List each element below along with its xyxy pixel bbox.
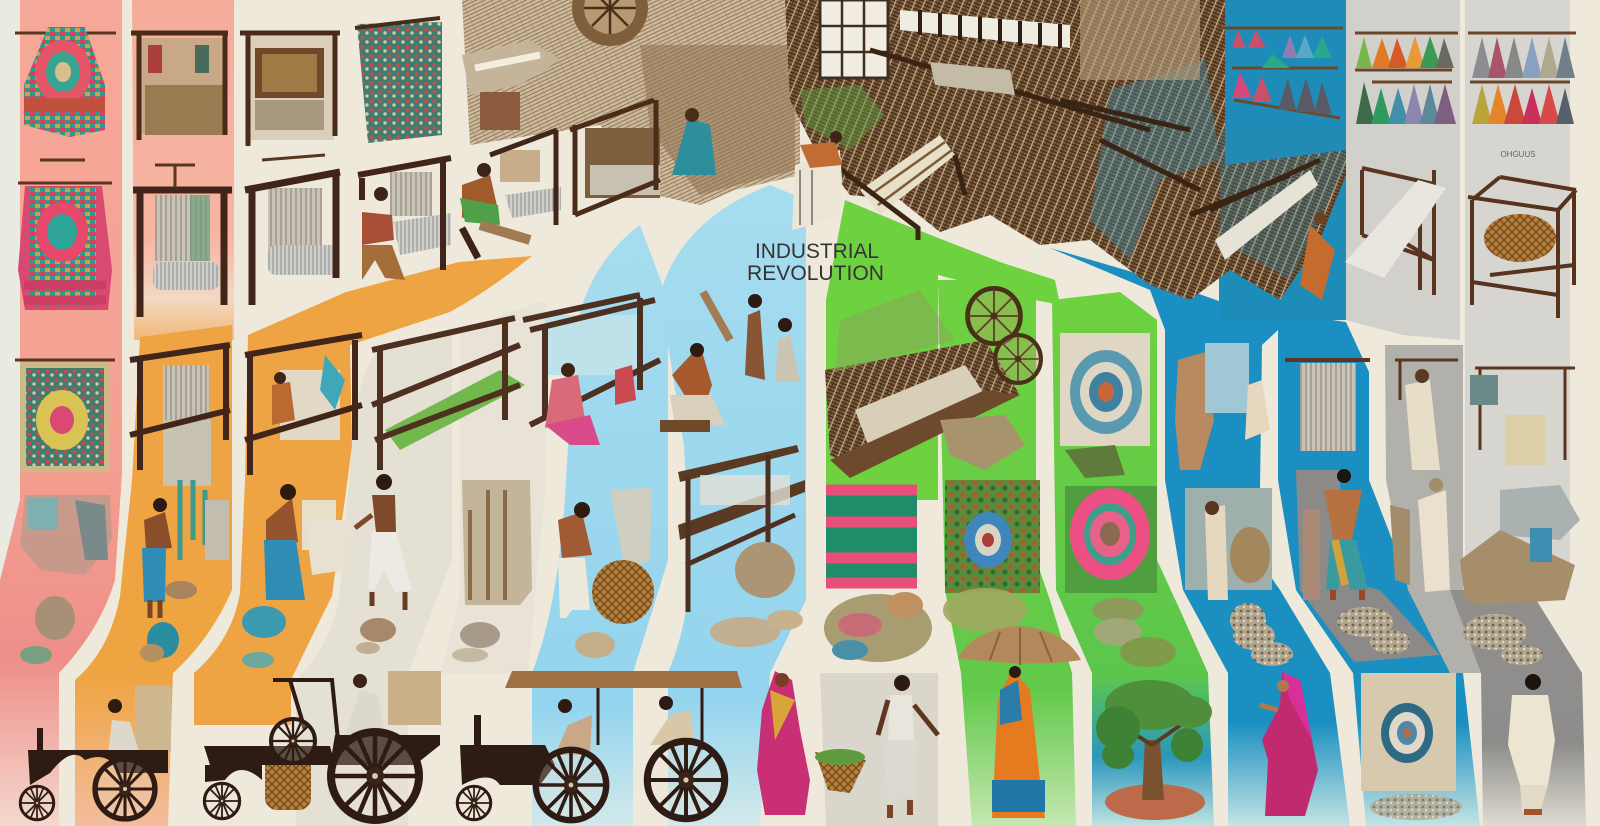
stream: beige column seven — [820, 673, 938, 826]
rider one head — [558, 699, 572, 713]
small wheel — [20, 786, 54, 820]
shelf: cones in blue panel — [1220, 28, 1343, 118]
machine body — [825, 340, 1020, 470]
panel: sketch clutter upper middle — [462, 0, 800, 205]
bushes: green — [1092, 598, 1176, 667]
row: third looms — [15, 288, 1041, 486]
canopy rail — [273, 680, 338, 740]
tapestry: top floral — [355, 18, 442, 143]
figure: man with loom — [264, 484, 352, 600]
loom frame — [1362, 168, 1434, 295]
bundles orange one — [140, 581, 197, 662]
sketch area — [462, 0, 800, 205]
loom: white cloth right — [1345, 168, 1446, 295]
shelf rack — [1220, 28, 1343, 118]
stream: green column nine — [1052, 292, 1214, 826]
figure: man in cream — [1508, 674, 1555, 812]
loom: row 3 d with worker — [523, 295, 660, 445]
cones row 2 left — [1356, 82, 1456, 124]
basket — [592, 560, 654, 624]
small wheel — [457, 786, 491, 820]
loom: top 2 — [131, 33, 228, 140]
deck — [330, 735, 440, 765]
figure: white robes grey — [1390, 478, 1450, 592]
figure: man in white — [878, 675, 938, 818]
factory clutter — [785, 0, 1346, 300]
loom: row 3 a — [130, 345, 230, 486]
posts — [598, 688, 702, 750]
white warp — [1300, 363, 1356, 451]
loom: row 2 d with green worker — [460, 130, 561, 258]
figure: kneeling white — [1405, 380, 1440, 470]
cart two — [204, 671, 441, 820]
factory stone sign — [930, 62, 1015, 95]
factory high windows — [900, 10, 1070, 48]
figure: woman in magenta sari — [1260, 672, 1318, 816]
factory green plants — [800, 85, 885, 150]
gravel — [1370, 794, 1462, 820]
row: fourth figures — [20, 445, 1580, 668]
tapestry: stripes — [826, 485, 917, 588]
shelf: left rods — [1355, 33, 1458, 82]
machine base — [830, 390, 1020, 478]
cart one — [20, 686, 171, 820]
tapestry: row 2 — [18, 160, 112, 310]
rider two — [650, 710, 695, 745]
panel: cone shelves right — [1355, 33, 1576, 159]
people: two fibre workers — [703, 292, 800, 382]
driver head — [108, 699, 122, 713]
loom: row 2 e — [570, 100, 660, 215]
row: bottom carts and people — [20, 626, 1555, 820]
rider one — [555, 715, 592, 755]
loom: row 2 a — [133, 165, 232, 317]
plant clump under floral — [943, 588, 1027, 632]
stream: beige column four — [440, 300, 546, 673]
bundle blue big — [710, 542, 803, 647]
factory white warp beam — [1215, 170, 1318, 260]
stream: green wash — [826, 200, 1060, 500]
bundles light blue — [575, 488, 652, 658]
figure: white robed — [1245, 380, 1270, 440]
people: blue panel group — [1175, 343, 1370, 470]
cart three — [457, 671, 742, 820]
rocks: blue — [1230, 603, 1293, 666]
head — [1415, 369, 1429, 383]
loom: row 3 c — [372, 318, 525, 470]
figure: man at warp — [1175, 352, 1214, 470]
body — [460, 745, 555, 785]
sketch: bedding — [462, 40, 560, 130]
funnel — [37, 728, 43, 750]
loom: blue table loom — [678, 445, 805, 612]
nest — [1484, 214, 1556, 262]
plant clump green — [940, 415, 1025, 470]
mid wheel — [271, 719, 315, 763]
loom rod — [1285, 358, 1370, 362]
stream: orange column one — [75, 325, 232, 826]
figure: woman in orange sari — [992, 666, 1045, 818]
body — [28, 750, 168, 785]
blue machinery patch — [1090, 60, 1220, 260]
yarn roll — [1505, 415, 1545, 465]
cones — [1232, 30, 1272, 102]
stream: light blue column six — [660, 185, 806, 826]
sketch shade — [640, 45, 795, 195]
wheel lower — [995, 335, 1041, 383]
factory white roller rack — [835, 135, 965, 240]
bundles beige two — [452, 622, 500, 662]
icon: tree — [1096, 680, 1212, 820]
loom: row 2 c with worker — [358, 158, 451, 280]
rocks: grey mid — [1337, 607, 1410, 654]
driver — [108, 720, 140, 755]
stream: grey column eleven — [1465, 0, 1570, 590]
stream: pink column one — [0, 0, 122, 826]
bale — [135, 686, 171, 752]
clutter: right bales — [1460, 485, 1580, 605]
wheel b — [647, 741, 725, 819]
figure: man with basket — [558, 502, 592, 618]
white cloth — [1345, 180, 1446, 278]
stream: beige column three — [296, 330, 452, 826]
loom: nest right — [1468, 177, 1576, 318]
plant clump green two — [1065, 445, 1125, 478]
people: grey panel loom group — [1395, 360, 1575, 470]
driver — [345, 690, 385, 735]
figure: man from back — [1303, 469, 1368, 600]
worker: seated teal — [672, 108, 716, 175]
cones row 1 left — [1356, 36, 1454, 68]
machine: green spinning machine — [825, 288, 1041, 478]
loom: row 3 b — [245, 335, 362, 475]
row: top textiles — [15, 18, 560, 146]
factory beams — [870, 50, 1320, 215]
tapestry: pink mandala — [1065, 486, 1157, 593]
rider two head — [659, 696, 673, 710]
row: second looms — [18, 100, 660, 317]
tapestry: top 1 — [15, 27, 116, 137]
figure: woman in pink sari — [757, 671, 810, 815]
warp hangings one — [180, 480, 229, 560]
shelf: right rods — [1468, 33, 1576, 82]
worker: orange figure in factory — [1300, 212, 1335, 300]
basket — [265, 755, 311, 810]
stream: grey column ten — [1346, 0, 1460, 340]
title line two: REVOLUTION — [747, 262, 884, 285]
rocks: grey right — [1463, 614, 1543, 665]
body — [204, 746, 335, 782]
basket: green leaves — [815, 749, 866, 793]
sketch: pink strip weaver — [20, 495, 112, 575]
cones teal — [1262, 35, 1332, 68]
funnel — [474, 715, 481, 745]
tapestry: mandala upper green — [1060, 333, 1150, 446]
wheel a — [536, 750, 606, 820]
small wheel — [204, 783, 240, 819]
stream: grey column ten lower — [1385, 345, 1498, 673]
stream: pink column two — [132, 0, 234, 340]
panel: factory interior — [672, 0, 1346, 300]
left margin tint — [0, 0, 20, 580]
stream: light blue column five — [532, 225, 668, 826]
blue right machinery — [1220, 130, 1346, 280]
stream: blue upper band — [1050, 248, 1480, 826]
stream: blue vertical top — [1219, 0, 1346, 320]
cones dark — [1278, 78, 1332, 114]
loom: top 3 — [240, 33, 340, 146]
wheel upper — [968, 288, 1020, 344]
loom: row 2 b — [245, 155, 340, 305]
icon: factory window — [820, 0, 888, 78]
sketch base — [462, 0, 800, 205]
icon: umbrella — [958, 626, 1081, 665]
white loom frame — [1395, 360, 1575, 460]
title: Industrial Revolution — [747, 240, 884, 285]
figure: blue dhoti man — [142, 498, 172, 618]
machine warp — [855, 365, 985, 450]
loom frame — [1468, 177, 1576, 318]
bale — [388, 671, 441, 725]
roof — [505, 671, 742, 688]
warp blue — [1205, 343, 1249, 413]
panel: blue sparkle tapestry — [1185, 488, 1272, 600]
bundles pink — [20, 596, 75, 664]
small caption: OHGUUS — [1500, 150, 1536, 159]
worker: bending man — [792, 131, 842, 230]
stream: grey column twelve — [1450, 590, 1586, 826]
tapestry: floral mandala — [945, 480, 1040, 593]
icon: top spinning wheel — [572, 0, 648, 46]
machine foliage — [835, 290, 955, 372]
factory columns — [1080, 0, 1200, 80]
stream: grey overlay — [1296, 470, 1440, 662]
figure: man in white dhoti — [355, 474, 412, 610]
cones row 2 right — [1472, 84, 1574, 124]
driver head — [353, 674, 367, 688]
stream: orange diagonal wash — [194, 256, 532, 725]
title line one: INDUSTRIAL — [755, 240, 879, 263]
tapestry: bottom mandala — [1361, 673, 1456, 791]
pile: colourful fibres — [824, 592, 932, 662]
sketch: beige group — [462, 480, 532, 605]
stream: green column eight — [938, 280, 1076, 826]
bundles orange two — [242, 606, 286, 668]
tapestry: row 3 — [15, 360, 115, 472]
worker: seated fibre man — [660, 343, 725, 432]
bundles beige one — [356, 618, 396, 654]
teal item — [1470, 375, 1498, 405]
big wheel — [331, 732, 419, 820]
cones row 1 right — [1472, 37, 1575, 78]
big wheel — [95, 759, 155, 819]
